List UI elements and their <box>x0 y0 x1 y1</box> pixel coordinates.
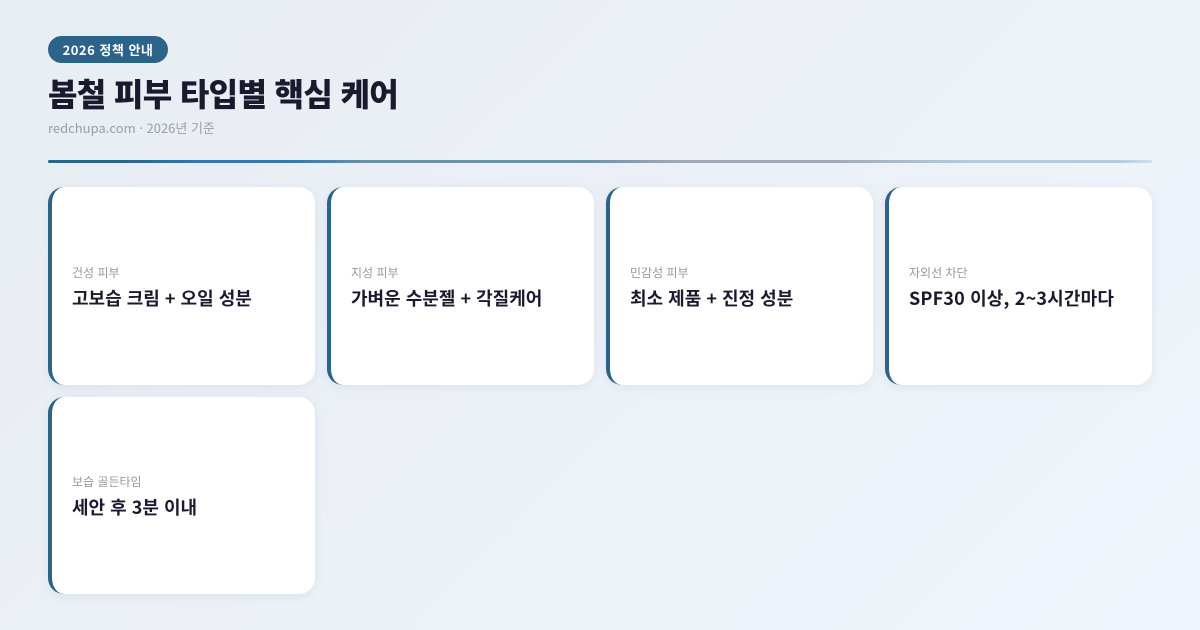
value: golden time: 세안 후 3분 이내 <box>72 494 197 520</box>
value: oily skin: 가벼운 수분젤 + 각질케어 <box>351 285 542 311</box>
badge: 2026 정책 안내 <box>63 40 153 59</box>
label: dry skin: 건성 피부 <box>72 264 120 281</box>
value: dry skin: 고보습 크림 + 오일 성분 <box>72 285 252 311</box>
label: UV protection: 자외선 차단 <box>909 264 968 281</box>
label: oily skin: 지성 피부 <box>351 264 399 281</box>
panel: sensitive skin <box>606 187 873 385</box>
panel: UV protection <box>885 187 1152 385</box>
label: golden time: 보습 골든타임 <box>72 473 142 490</box>
badge <box>48 36 168 63</box>
title: 봄철 피부 타입별 핵심 케어 <box>48 70 398 116</box>
panel: oily skin <box>327 187 594 385</box>
panel: moisturizing golden time <box>48 397 315 594</box>
value: sensitive skin: 최소 제품 + 진정 성분 <box>630 285 793 311</box>
value: UV protection: SPF30 이상, 2~3시간마다 <box>909 285 1114 311</box>
label: sensitive skin: 민감성 피부 <box>630 264 689 281</box>
subtitle: redchupa.com · 2026년 기준 <box>48 118 215 137</box>
panel: dry skin <box>48 187 315 385</box>
